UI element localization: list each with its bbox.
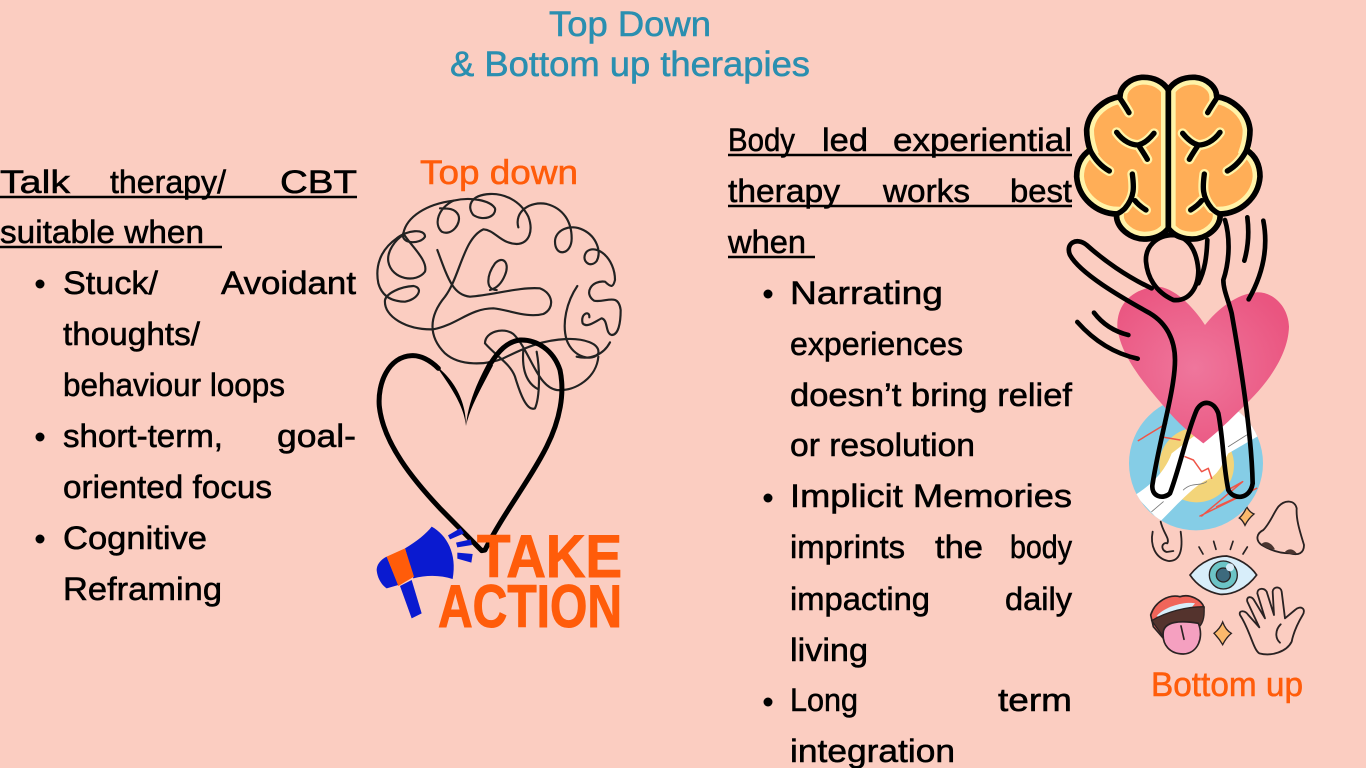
icon: nostrils: [1262, 542, 1297, 554]
heading: body led: Body: [728, 122, 795, 158]
list: top down points: thoughts/: [63, 316, 200, 352]
list: bottom up points: doesn’t bring relief: [790, 377, 1072, 413]
icon: person outline: [1069, 217, 1265, 497]
list: top down points: [36, 265, 356, 607]
title: Top Down: [549, 5, 711, 44]
label: bottom up: Bottom up: [1151, 666, 1303, 704]
heading: body led: when: [727, 224, 806, 260]
heading: talk therapy: therapy/: [110, 164, 226, 200]
heading: body led: led: [822, 122, 868, 158]
list: bottom up points: [764, 275, 1072, 768]
icon: mouth: [1151, 596, 1204, 654]
panel: body led therapy text: [727, 122, 1072, 768]
icon: ear: [1152, 522, 1182, 561]
label: take action: TAKE: [477, 523, 622, 590]
heading: body led: experiential: [893, 122, 1072, 158]
list: top down points: behaviour loops: [63, 367, 285, 403]
list: top down points: short-term,: [63, 418, 223, 454]
list: bottom up points: living: [790, 632, 868, 668]
list: bottom up points: the: [935, 529, 983, 565]
icon: sparkle: [1214, 622, 1231, 645]
icon: nose: [1257, 502, 1304, 554]
list: bottom up points: Narrating: [790, 275, 943, 311]
icon: sparkle upper: [1239, 507, 1254, 525]
list: bottom up points: imprints: [790, 529, 905, 565]
heading: talk therapy: [0, 164, 357, 250]
label: take action: [438, 523, 622, 640]
title: [450, 5, 810, 84]
icon: five senses: [1151, 502, 1304, 654]
panel: talk therapy text: [0, 164, 357, 607]
list: bottom up points: integration: [790, 733, 955, 768]
title: & Bottom up therapies: [450, 45, 810, 84]
list: bottom up points: or resolution: [790, 427, 975, 463]
heading: body led: therapy: [728, 173, 840, 209]
list: bottom up points: daily: [1005, 581, 1072, 617]
icon: pink heart: [1117, 287, 1289, 443]
icon: scribble brain: [377, 194, 621, 409]
heading: body led: best: [1010, 173, 1072, 209]
icon: eye: [1190, 541, 1257, 594]
icon: heart outline: [379, 340, 562, 551]
list: top down points: goal-: [277, 418, 356, 454]
list: bottom up points: Implicit Memories: [790, 478, 1072, 514]
icon: orange brain: [1077, 77, 1260, 239]
list: bottom up points: Long: [790, 682, 858, 718]
list: bottom up points: experiences: [790, 326, 963, 362]
heading: talk therapy: CBT: [280, 164, 357, 200]
list: bottom up points: body: [1010, 529, 1072, 565]
heading: body led: [727, 122, 1072, 260]
label: top down: Top down: [420, 154, 578, 192]
heading: talk therapy: Talk: [0, 164, 71, 200]
list: top down points: Cognitive: [63, 520, 207, 556]
label: take action: ACTION: [438, 573, 622, 640]
list: bottom up points: impacting: [790, 581, 930, 617]
heading: talk therapy: suitable when: [0, 214, 204, 250]
icon: megaphone: [377, 527, 473, 618]
list: top down points: Stuck/: [63, 265, 158, 301]
list: bottom up points: term: [998, 682, 1072, 718]
icon: wounded circle: [1129, 396, 1263, 530]
list: top down points: oriented focus: [63, 469, 272, 505]
list: top down points: Avoidant: [221, 265, 356, 301]
heading: body led: works: [882, 173, 970, 209]
icon: hand: [1240, 587, 1304, 654]
list: top down points: Reframing: [63, 571, 222, 607]
